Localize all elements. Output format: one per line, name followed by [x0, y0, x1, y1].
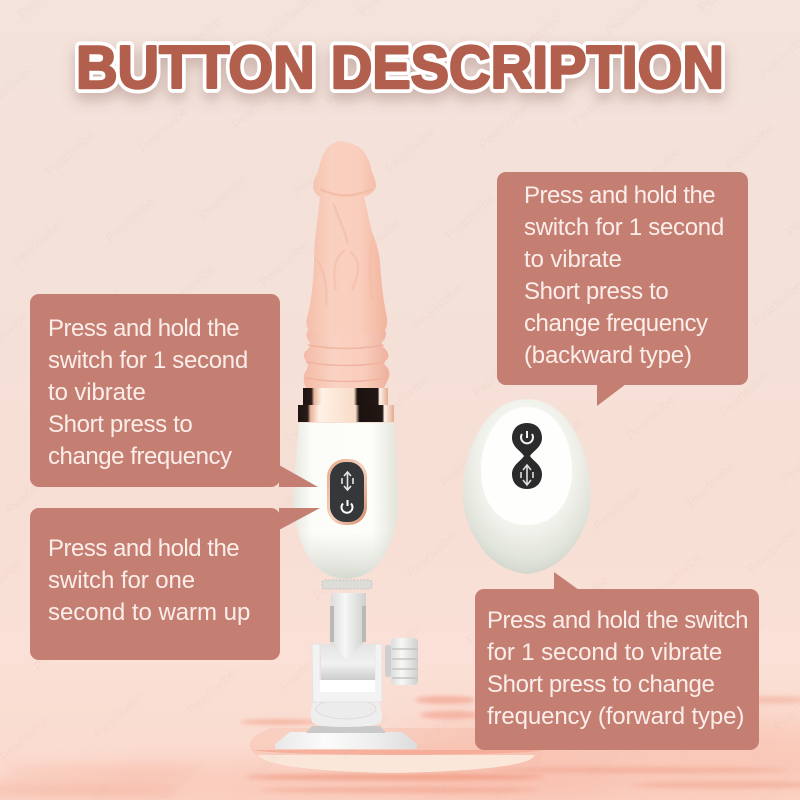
device body	[293, 423, 398, 579]
shaft	[306, 141, 387, 334]
knob	[385, 638, 418, 685]
callout: body frequency button: Short press to	[48, 411, 192, 438]
device collar	[298, 388, 394, 422]
title: BUTTON DESCRIPTION	[76, 34, 724, 101]
callout: remote forward type: for 1 second to vibrate	[487, 639, 722, 666]
callout: remote forward type: frequency (forward type)	[487, 703, 744, 730]
callout: remote backward type: Short press to	[524, 278, 668, 305]
ribbed section	[304, 328, 389, 388]
button pad	[512, 423, 542, 489]
icon: power	[521, 431, 533, 443]
callout: remote forward type: Short press to change	[487, 671, 714, 698]
control panel	[327, 459, 367, 525]
callout: body warm-up button: switch for one	[48, 567, 195, 594]
callout: remote forward type: Press and hold the switch	[487, 607, 748, 634]
clip	[312, 644, 382, 702]
base plate	[275, 732, 417, 749]
callout: remote backward type	[497, 172, 748, 385]
callout: body frequency button: switch for 1 second	[48, 347, 248, 374]
remote control	[463, 399, 591, 574]
callout: remote backward type: change frequency	[524, 310, 708, 337]
device shaft	[304, 141, 389, 388]
icon: frequency	[521, 465, 533, 485]
device base mount	[275, 580, 418, 749]
callout: body frequency button: to vibrate	[48, 379, 146, 406]
water surface	[0, 696, 800, 800]
nut	[322, 580, 372, 589]
stem	[331, 593, 366, 659]
callout: remote backward type: switch for 1 second	[524, 214, 724, 241]
callout: remote backward type: to vibrate	[524, 246, 622, 273]
callout tails	[279, 384, 626, 590]
suction cup	[311, 700, 382, 727]
icon: power	[342, 500, 352, 513]
callout: body warm-up button: second to warm up	[48, 599, 250, 626]
callout: body warm-up button	[30, 508, 280, 660]
callout: body frequency button	[30, 294, 280, 487]
callout: body frequency button: Press and hold the	[48, 315, 239, 342]
callout: body warm-up button: Press and hold the	[48, 535, 239, 562]
icon: frequency	[342, 472, 353, 490]
cross barrel	[321, 644, 375, 680]
glass disc	[249, 728, 542, 775]
callout: remote backward type: Press and hold the	[524, 182, 715, 209]
title: BUTTON DESCRIPTION	[76, 34, 724, 101]
callout: remote backward type: (backward type)	[524, 342, 692, 369]
callout: remote forward type	[475, 589, 759, 750]
callout: body frequency button: change frequency	[48, 443, 232, 470]
